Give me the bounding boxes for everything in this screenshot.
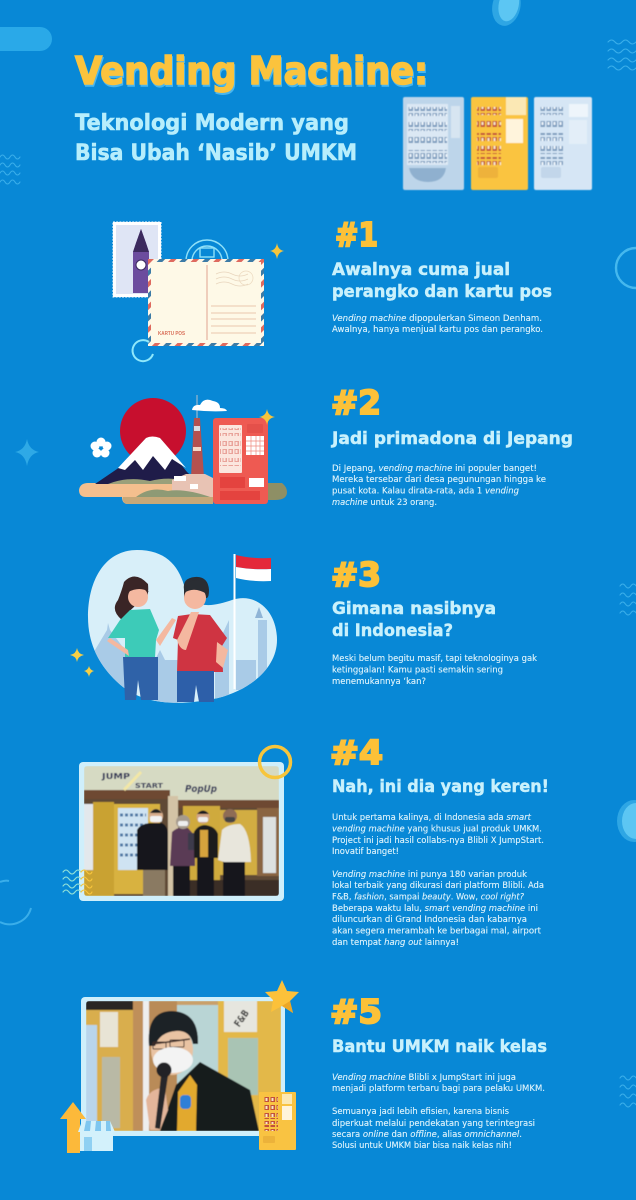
body 2: machine untuk 23 orang. (332, 498, 437, 508)
title: Vending Machine: (75, 49, 428, 93)
body 5 paragraph 2: secara online dan offline, alias omnichannel. (332, 1130, 522, 1140)
body 4 paragraph 2: akan segera merambah ke berbagai mal, airport (332, 926, 542, 936)
section 1 text (332, 215, 552, 335)
flag (234, 554, 271, 689)
person: man (173, 577, 228, 702)
heading 3: di Indonesia? (332, 621, 453, 641)
icon: arrow up (60, 1102, 86, 1153)
subtitle: Bisa Ubah ‘Nasib’ UMKM (75, 141, 357, 166)
photo frame (81, 997, 285, 1136)
body 5 paragraph 1: Vending machine Blibli x JumpStart ini juga (332, 1073, 516, 1083)
body 1: Vending machine dipopulerkan Simeon Denham. (332, 314, 542, 324)
body 4 paragraph 1: Inovatif banget! (332, 847, 399, 857)
body 5 paragraph 2: Solusi untuk UMKM biar bisa naik kelas nih! (332, 1141, 512, 1151)
photo: F&B (233, 1008, 252, 1029)
sign text: START (135, 782, 163, 790)
people (137, 809, 168, 896)
person: woman (107, 576, 176, 700)
number 1: #1 (335, 215, 378, 254)
heading 3: Gimana nasibnya (332, 599, 496, 619)
houses (123, 474, 213, 504)
body 4 paragraph 1: Project ini jadi hasil collabs-nya Blibli X JumpStart. (332, 836, 544, 846)
panel 5: photo of speaker (60, 980, 299, 1153)
illustration 1: stamp and postcard (113, 222, 284, 361)
body 5 paragraph 2 (332, 1107, 535, 1151)
heading 4: Nah, ini dia yang keren! (332, 777, 549, 797)
body 1: Awalnya, hanya menjual kartu pos dan perangko. (332, 325, 543, 335)
illustration 2: Japan and vending machine (79, 395, 287, 504)
number 2: #2 (331, 383, 381, 422)
body 2: Mereka tersebar dari desa pegunungan hingga ke (332, 475, 546, 485)
number 4: #4 (330, 733, 383, 772)
icon: stamp (113, 222, 161, 297)
body 2: pusat kota. Kalau dirata-rata, ada 1 vending (332, 486, 520, 496)
person (160, 1062, 259, 1131)
section 2 text (331, 383, 573, 508)
body 2: Di Jepang, vending machine ini populer banget! (332, 464, 537, 474)
section 4 text (330, 733, 549, 948)
icon: shop (78, 1121, 115, 1151)
body 4 paragraph 1: Untuk pertama kalinya, di Indonesia ada smart (332, 813, 532, 823)
number 3: #3 (331, 555, 381, 594)
machine: light (534, 97, 592, 190)
number 5: #5 (330, 992, 382, 1031)
body 5 paragraph 1: menjadi platform terbaru bagi para pelaku UMKM. (332, 1084, 545, 1094)
illustration 3: two people and Indonesian flag (70, 550, 277, 705)
body 4 paragraph 2: Vending machine ini punya 180 varian produk (332, 870, 527, 880)
decoration: top left pill (0, 27, 52, 51)
heading 2: Jadi primadona di Jepang (331, 429, 573, 449)
body 4 paragraph 2: diluncurkan di Grand Indonesia dan kabarnya (332, 915, 527, 925)
photo (84, 766, 279, 896)
icon: star (265, 980, 299, 1013)
ground (79, 483, 213, 504)
icon: sparkle (270, 243, 284, 259)
body 4 paragraph 2: Beberapa waktu lalu, smart vending machine ini (332, 904, 538, 914)
blob background (88, 550, 277, 703)
body 4 paragraph 1: vending machine yang khusus jual produk UMKM. (332, 824, 542, 834)
icon: mountain (95, 436, 200, 484)
decoration: top ellipse (489, 0, 524, 29)
decoration: arc left (0, 881, 31, 924)
icon: postmark (186, 240, 228, 261)
subtitle: Teknologi Modern yang (75, 111, 349, 136)
decoration: waves left (0, 155, 20, 184)
subtitle (75, 111, 357, 166)
body 3: ketinggalan! Kamu pasti semakin sering (332, 666, 503, 676)
icon: red sun (120, 398, 186, 464)
decoration: waves top right (608, 40, 636, 70)
body 3: menemukannya ‘kan? (332, 677, 426, 687)
heading 1: perangko dan kartu pos (332, 282, 552, 302)
heading 1 (332, 260, 552, 302)
body 2 (332, 464, 546, 508)
postcard: KARTU POS (158, 331, 185, 337)
section 5 text (330, 992, 547, 1151)
body 4 paragraph 2: dan tempat hang out lainnya! (332, 938, 459, 948)
body 5 paragraph 2: diperkuat melalui pendekatan yang terintegrasi (332, 1119, 535, 1129)
body 4 paragraph 2: F&B, fashion, sampai beauty. Wow, cool right? (332, 892, 524, 902)
decoration: sparkle left (15, 439, 39, 466)
icon: cloud (192, 400, 227, 411)
body 5 paragraph 2: Semuanya jadi lebih efisien, karena bisnis (332, 1107, 510, 1117)
icon: ring (133, 340, 153, 361)
skyline (95, 607, 267, 705)
ground: right edge (266, 483, 287, 500)
body 4 paragraph 1 (332, 813, 544, 857)
body 5 paragraph 1 (332, 1073, 545, 1094)
decoration: arc right (616, 248, 636, 288)
vending machine: red (213, 418, 268, 504)
sign text: PopUp (185, 784, 217, 795)
body 3 (332, 654, 537, 687)
body 3: Meski belum begitu masif, tapi teknologinya gak (332, 654, 537, 664)
illustration: three vending machines (403, 97, 592, 190)
body 4 paragraph 2: lokal terbaik yang dikurasi dari platform Blibli. Ada (332, 881, 544, 891)
section 3 text (331, 555, 537, 687)
icon: sparkle (259, 409, 275, 425)
sign text: JUMP (101, 772, 130, 781)
icon: flower (90, 438, 112, 458)
machine: yellow (471, 97, 528, 190)
decoration: waves right middle (620, 584, 636, 615)
photo (86, 1001, 281, 1131)
heading 5: Bantu UMKM naik kelas (332, 1037, 547, 1057)
sign text (101, 772, 217, 795)
icon: tower (191, 395, 204, 477)
postcard (148, 259, 264, 346)
icon: yellow ring (260, 746, 290, 778)
body 1 (332, 314, 543, 335)
heading 3 (332, 599, 496, 641)
photo frame (79, 762, 284, 901)
icon: yellow vending machine (259, 1092, 296, 1150)
body 4 paragraph 2 (332, 870, 544, 948)
decoration: ellipse right (617, 800, 636, 842)
panel 4: photo of smart vending machines (63, 746, 290, 901)
heading 1: Awalnya cuma jual (332, 260, 510, 280)
machine: blue (403, 97, 464, 190)
icon: sparkles (70, 648, 94, 677)
icon: waves (63, 870, 92, 894)
decoration: waves right bottom (620, 1076, 636, 1107)
